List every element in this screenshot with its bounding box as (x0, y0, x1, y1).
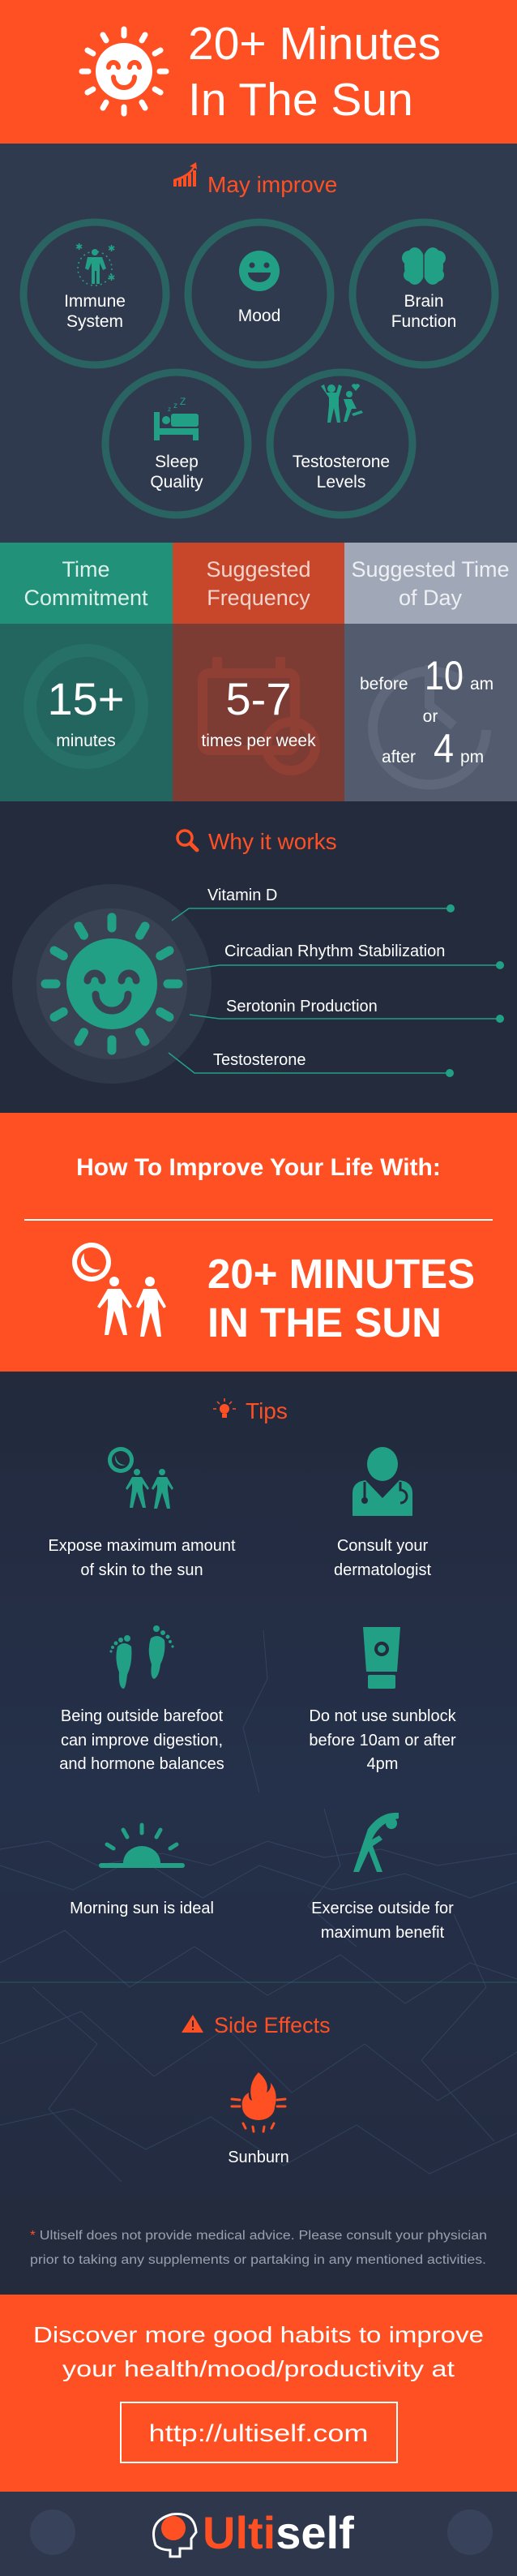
benefit: immune system: ✱ (75, 243, 83, 252)
tip: exercise (311, 1813, 454, 1942)
heading: tips (213, 1398, 288, 1423)
heading: may improve: May improve (207, 172, 337, 197)
icon: faint clock (373, 665, 486, 784)
benefit: testosterone levels: Levels (317, 473, 365, 492)
benefit: immune system: System (66, 312, 123, 331)
call to action (0, 2295, 517, 2492)
benefit: immune system (24, 222, 166, 365)
benefit: sleep quality: z (173, 401, 177, 410)
disclaimer (0, 2199, 517, 2295)
panel: suggested time of day: Suggested Time (351, 557, 510, 582)
benefit: sleep quality: z (168, 406, 171, 413)
call to action: your health/mood/productivity at (62, 2356, 455, 2381)
url box: http://ultiself.com (149, 2420, 368, 2447)
panel: suggested frequency: 5-7 (226, 673, 291, 724)
benefit: brain function: Function (391, 312, 456, 331)
disclaimer: * Ultiself does not provide medical advice. Please consult your physician (30, 2229, 487, 2243)
panel: suggested frequency: Frequency (207, 586, 310, 610)
benefit: testosterone levels (270, 372, 412, 515)
icon: faint calendar (203, 657, 315, 771)
banner: how to improve (0, 1113, 517, 1372)
panel: suggested frequency: Suggested (206, 557, 311, 582)
tip: barefoot: and hormone balances (59, 1755, 224, 1773)
header banner (0, 0, 517, 144)
panel: suggested time of day: 4 (434, 726, 454, 771)
banner: how to improve: 20+ MINUTES (207, 1251, 475, 1297)
panel: may improve (0, 144, 517, 543)
benefit: immune system: ✱ (108, 244, 115, 254)
url box (121, 2402, 397, 2462)
panel: time commitment (0, 543, 173, 801)
tip: exercise: Exercise outside for (311, 1900, 454, 1917)
icon: smiling sun (82, 29, 166, 114)
panel: suggested time of day: am (470, 675, 494, 693)
panel: suggested time of day: after (382, 748, 416, 766)
icon: faint clock (24, 644, 148, 769)
icon: sun and couple (72, 1243, 166, 1337)
disclaimer: prior to taking any supplements or partaking in any mentioned activities. (30, 2253, 486, 2267)
panel: time commitment: Time (62, 557, 110, 582)
panel: time commitment: minutes (56, 732, 116, 750)
item: serotonin (190, 998, 504, 1023)
tip: dermatologist: dermatologist (334, 1561, 431, 1579)
panel: suggested time of day: before (360, 675, 408, 693)
benefit: sleep quality (105, 372, 248, 515)
panel: why it works (0, 801, 517, 1113)
banner: how to improve: IN THE SUN (207, 1299, 442, 1346)
item: serotonin: Serotonin Production (226, 998, 378, 1015)
benefit: mood (188, 222, 331, 365)
tip: expose skin: Expose maximum amount (48, 1537, 236, 1555)
footer logo (0, 2492, 517, 2576)
benefit: mood: Mood (238, 307, 280, 325)
icon: sunburn flame (232, 2072, 285, 2132)
tip: sunblock (309, 1627, 457, 1773)
panel: tips (0, 1372, 517, 2199)
heading: side effects: Side Effects (214, 2013, 331, 2037)
item: circadian rhythm: Circadian Rhythm Stabilization (224, 942, 445, 960)
tip: sunblock: Do not use sunblock (309, 1707, 457, 1725)
icon: big smiling sun (12, 884, 212, 1084)
benefit: sleep quality: Z (180, 396, 186, 407)
tip: morning sun: Morning sun is ideal (70, 1900, 214, 1917)
icon: brain head (154, 2514, 196, 2557)
tip: morning sun (70, 1825, 214, 1917)
panel: suggested frequency: times per week (201, 732, 316, 750)
tip: expose skin: of skin to the sun (80, 1561, 203, 1579)
panel: suggested frequency (173, 543, 344, 801)
benefit: testosterone levels: Testosterone (293, 453, 390, 471)
panel: time commitment: 15+ (47, 673, 125, 724)
title: 20+ Minutes (188, 18, 441, 70)
panel: suggested time of day (344, 543, 517, 801)
tip: barefoot: Being outside barefoot (61, 1707, 224, 1725)
item: circadian rhythm (186, 942, 504, 970)
benefit: immune system: ✱ (108, 273, 115, 283)
heading: tips: Tips (246, 1398, 288, 1423)
item: testosterone: Testosterone (213, 1051, 306, 1069)
heading: may improve (173, 162, 337, 197)
panel: suggested time of day: 10 (425, 653, 464, 698)
heading: why it works: Why it works (208, 829, 337, 854)
panel: suggested time of day: or (423, 707, 438, 726)
title: In The Sun (188, 74, 413, 126)
panel: suggested time of day: of Day (399, 586, 463, 610)
benefit: brain function (352, 222, 495, 365)
footer logo: Ultiself (203, 2507, 354, 2558)
item: testosterone (169, 1051, 454, 1077)
tip: dermatologist: Consult your (337, 1537, 428, 1555)
tip: barefoot (59, 1625, 224, 1773)
call to action: Discover more good habits to improve (33, 2322, 484, 2347)
panel: suggested time of day: pm (460, 748, 484, 766)
title (188, 18, 441, 126)
tip: expose skin (48, 1447, 236, 1579)
tip: dermatologist (334, 1447, 431, 1579)
panel: time commitment: Commitment (24, 586, 148, 610)
benefit: sleep quality: Sleep (155, 453, 199, 471)
tip: sunblock: 4pm (367, 1755, 398, 1773)
benefit: brain function: Brain (404, 292, 444, 311)
benefit: immune system: Immune (64, 292, 126, 311)
panel: tips: Sunburn (228, 2149, 289, 2166)
tip: exercise: maximum benefit (321, 1924, 445, 1942)
item: vitamin d: Vitamin D (207, 887, 277, 904)
item: vitamin d (172, 887, 455, 921)
benefit: sleep quality: Quality (150, 473, 203, 492)
tip: barefoot: can improve digestion, (61, 1732, 223, 1750)
tip: sunblock: before 10am or after (309, 1732, 456, 1750)
banner: how to improve: How To Improve Your Life With: (76, 1154, 441, 1181)
